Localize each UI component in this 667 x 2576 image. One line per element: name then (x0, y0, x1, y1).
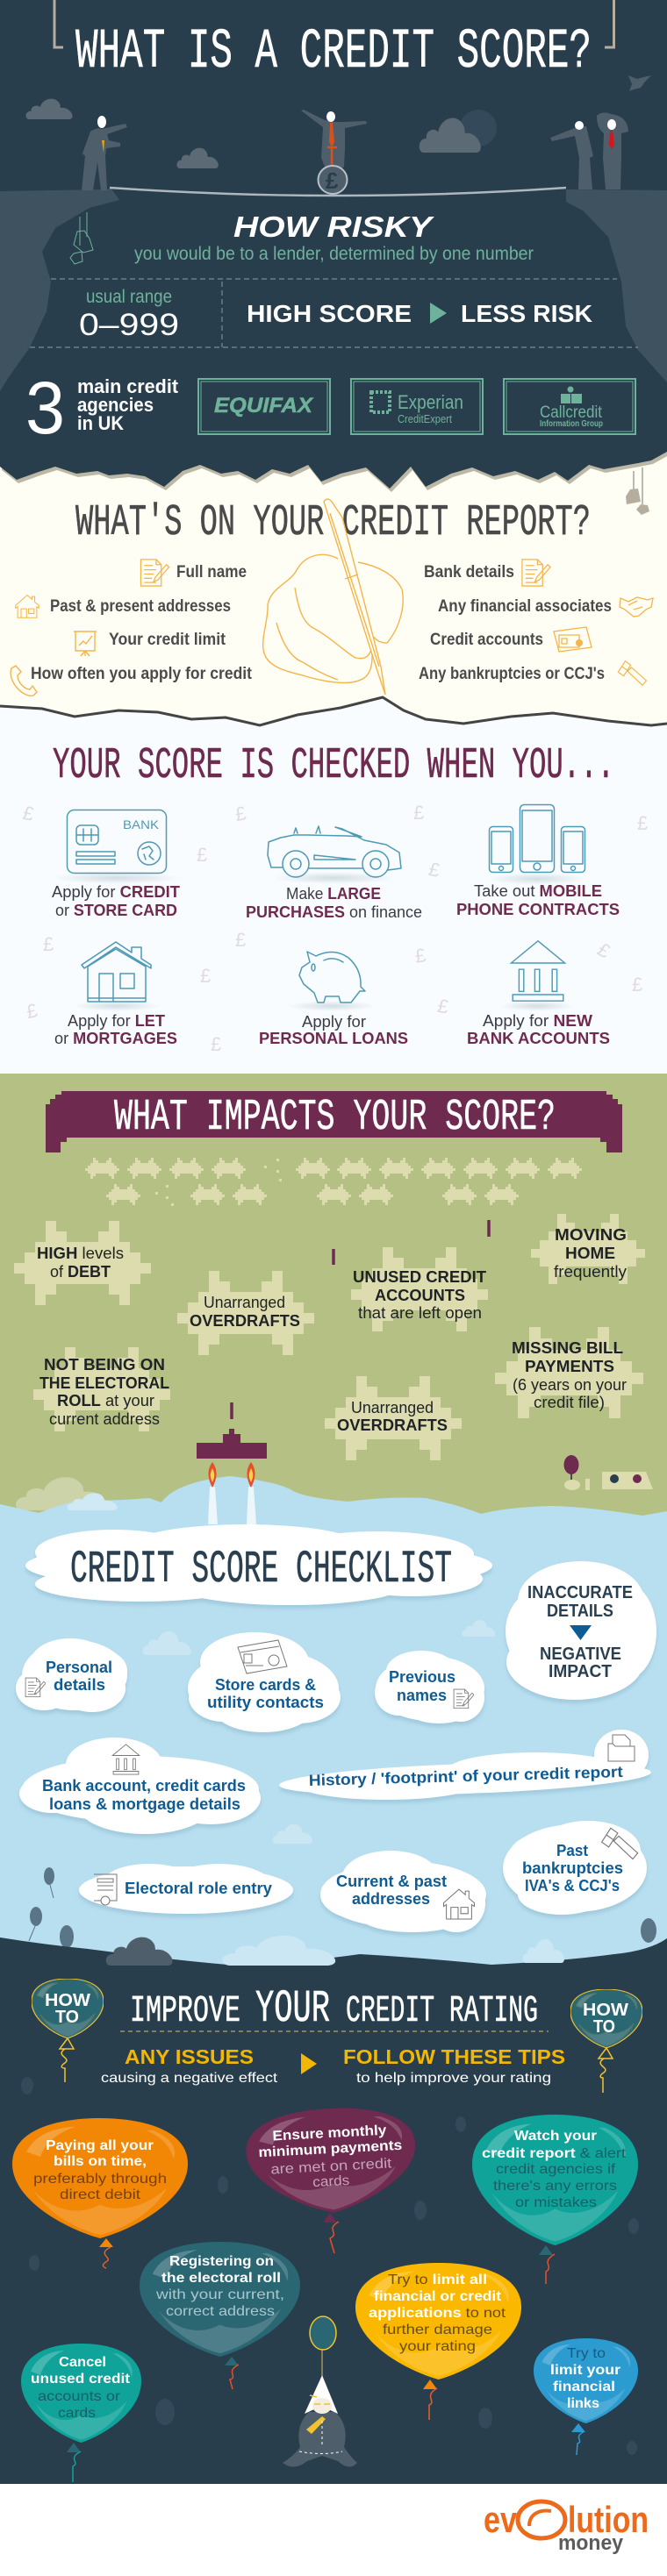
balloon: monthly payments: are met on credit (270, 2156, 392, 2178)
balloon: cancel unused credit (21, 2344, 141, 2482)
cloud: current and past addresses (320, 1851, 486, 1932)
how to balloon right: HOW (583, 2001, 628, 2020)
balloon: limit applications: financial or credit (374, 2289, 502, 2304)
balloon: limit financial links (534, 2338, 638, 2455)
logo box: Experian (351, 379, 483, 434)
heading: CREDIT RATING (346, 1989, 538, 2032)
panel: your score is checked when you (21, 741, 648, 1055)
balloon: monthly payments: cards (312, 2173, 350, 2190)
text: moving home: frequently (554, 1263, 627, 1281)
cloud: electoral role entry: Electoral role entry (125, 1880, 272, 1897)
balloon: limit applications: your rating (399, 2339, 476, 2354)
joystick and button panel (563, 1455, 653, 1490)
cloud: past bankruptcies: Past (556, 1842, 588, 1859)
item: bank building: Apply for NEW (483, 1012, 592, 1030)
balloon: watch credit report: credit agencies if (496, 2162, 616, 2177)
number: 3 agencies (25, 367, 179, 449)
item: house: Apply for LET (68, 1012, 165, 1030)
cloud: bank details: loans & mortgage details (49, 1795, 240, 1813)
text: electoral roll: ROLL at your (57, 1392, 154, 1409)
any issues (101, 2045, 278, 2086)
text: missing bill payments: PAYMENTS (525, 1358, 614, 1375)
balloon: limit applications: applications to not (369, 2306, 506, 2321)
text: unarranged overdrafts: Unarranged (204, 1294, 285, 1311)
cloud: store cards: utility contacts (207, 1694, 324, 1711)
follow these tips: FOLLOW THESE TIPS (343, 2045, 565, 2068)
title bracket (54, 0, 614, 47)
space invaders rows (85, 1158, 582, 1206)
light cloud (68, 1493, 117, 1510)
balloon: cancel unused credit: unused credit (31, 2372, 131, 2387)
balloon: electoral roll: Registering on (169, 2254, 274, 2269)
footer logo: evolution money: money (558, 2531, 624, 2555)
balloon: paying bills (12, 2118, 188, 2268)
item: piggy bank: PERSONAL LOANS (259, 1030, 408, 1047)
pound sign pattern (21, 802, 648, 1055)
item: house (54, 942, 177, 1047)
balloon: cancel unused credit: cards (58, 2406, 96, 2421)
cloud: current and past addresses: Current & past (336, 1873, 447, 1890)
how to balloon left (32, 1979, 104, 2082)
item: piggy bank (259, 952, 408, 1047)
text: unarranged overdrafts 2: OVERDRAFTS (337, 1416, 448, 1434)
item: addresses: Past & present addresses (50, 597, 231, 616)
balloon: limit applications (355, 2263, 521, 2420)
balloon: limit applications: Try to limit all (388, 2273, 487, 2287)
text: unused credit accounts (353, 1268, 486, 1322)
pound sign pattern: £ (211, 1033, 221, 1055)
any issues: causing a negative effect (101, 2071, 278, 2086)
text: unused credit accounts: that are left open (358, 1304, 482, 1322)
item: financial associates: Any financial associates (438, 597, 612, 616)
heading (130, 1983, 538, 2035)
text: electoral roll: THE ELECTORAL (39, 1374, 169, 1392)
text: moving home: MOVING (555, 1226, 627, 1244)
item: house: or MORTGAGES (54, 1030, 177, 1047)
cloud: inaccurate details: INACCURATE (527, 1583, 633, 1602)
how to balloon right (570, 1989, 642, 2093)
logo box: Equifax: EQUIFAX (214, 394, 314, 417)
text: unused credit accounts: ACCOUNTS (375, 1287, 465, 1304)
balloon: watch credit report (472, 2115, 638, 2284)
logo box: Experian: Experian (398, 391, 463, 413)
balloon: cancel unused credit: Cancel (59, 2355, 106, 2370)
balloon: limit financial links: financial (553, 2380, 615, 2394)
pound sign pattern: £ (43, 933, 54, 955)
cloud: current and past addresses: addresses (352, 1890, 430, 1908)
balloon: limit financial links: Try to (567, 2346, 606, 2361)
item: credit card: or STORE CARD (55, 902, 177, 919)
cloud: personal details (16, 1638, 127, 1712)
number: 3 agencies: in UK (77, 412, 124, 434)
game ship (197, 1429, 267, 1524)
cloud: store cards: Store cards & (215, 1676, 316, 1694)
high score less risk: HIGH SCORE (247, 300, 412, 327)
figures: two men on right (550, 112, 628, 189)
cloud: personal details: details (54, 1676, 105, 1694)
balloon: paying bills: Paying all your (46, 2138, 154, 2153)
clouds (26, 99, 497, 168)
footer logo: evolution money: lution (568, 2499, 649, 2540)
text: high debt: HIGH levels (37, 1245, 124, 1262)
arrow (301, 2053, 317, 2074)
text: moving home: HOME (565, 1245, 615, 1262)
tightrope (110, 188, 566, 196)
balloon: limit applications: further damage (383, 2323, 492, 2337)
pound sign pattern: £ (21, 802, 36, 825)
cloud: history footprint (279, 1730, 651, 1800)
item: bank details: Bank details (424, 563, 514, 582)
high score less risk: LESS RISK (461, 300, 592, 327)
pound sign pattern: £ (637, 812, 648, 834)
heading: how risky: HOW RISKY (233, 211, 435, 243)
balloon: watch credit report: or mistakes (515, 2195, 597, 2210)
faint balloons (21, 2077, 639, 2455)
item: bankruptcies: Any bankruptcies or CCJ's (419, 665, 605, 683)
pound sign pattern: £ (594, 938, 614, 962)
cloud: bank details (19, 1738, 261, 1834)
cloud: electoral role entry (79, 1864, 293, 1914)
balloon: electoral roll: correct address (166, 2304, 275, 2319)
text: electoral roll: current address (49, 1410, 160, 1428)
item: credit accounts (430, 627, 592, 652)
figure: unicyclist (301, 110, 367, 194)
balloon: watch credit report: Watch your (514, 2129, 597, 2144)
item: credit accounts: Credit accounts (430, 631, 543, 649)
cloud: previous names: names (397, 1687, 447, 1704)
how to balloon left: TO (55, 2008, 79, 2027)
logo box: Callcredit: Callcredit (540, 403, 603, 422)
icon: beige rocks (626, 467, 649, 515)
balloon: paying bills: bills on time, (54, 2154, 147, 2169)
figure: unicyclist: £ (326, 168, 339, 194)
balloon: watch credit report: there's any errors (493, 2179, 617, 2194)
any issues: ANY ISSUES (125, 2045, 254, 2068)
pound sign pattern: £ (235, 929, 246, 951)
hand and pen illustration (263, 499, 403, 695)
icon: bird (628, 75, 651, 91)
shadows (52, 872, 586, 1011)
balloon: paying bills: preferably through (33, 2172, 167, 2187)
figure: man floating with balloon (283, 2316, 357, 2467)
cloud: history footprint: History / 'footprint' of your credit report (309, 1763, 623, 1789)
pound sign pattern: £ (427, 858, 441, 881)
overlapping clouds (106, 1936, 564, 1966)
text: missing bill payments: credit file) (534, 1394, 605, 1411)
item: addresses (16, 596, 231, 617)
cloud: previous names: Previous (389, 1668, 455, 1686)
pound sign pattern: £ (632, 974, 642, 995)
pound sign pattern: £ (413, 802, 424, 824)
cloud: previous names (375, 1651, 484, 1723)
heading banner (46, 1091, 622, 1152)
subtitle: you would be to a lender, determined by one number (134, 244, 534, 264)
item: full name (140, 560, 247, 586)
text: electoral roll (39, 1356, 169, 1428)
logo box: Callcredit: Information Group (540, 418, 603, 429)
balloon: electoral roll: the electoral roll (161, 2271, 281, 2286)
balloon: limit financial links: links (567, 2396, 599, 2411)
panel: what impacts your score (0, 1074, 667, 1521)
figure: left man (82, 116, 127, 190)
cloud: inaccurate details: NEGATIVE (540, 1645, 621, 1664)
balloon: monthly payments (244, 2104, 419, 2253)
cloud: bank details: Bank account, credit cards (42, 1777, 246, 1795)
cloud: past bankruptcies: IVA's & CCJ's (525, 1877, 620, 1895)
text: moving home (554, 1226, 627, 1281)
laser bullets (232, 1220, 489, 1419)
icon: falling rocks (70, 212, 93, 264)
pound sign pattern: £ (25, 999, 39, 1023)
item: car (246, 826, 422, 921)
logo box: Equifax (198, 379, 330, 434)
footer logo: evolution money: ev (484, 2499, 518, 2540)
text: missing bill payments: MISSING BILL (512, 1339, 623, 1357)
text: unarranged overdrafts (190, 1294, 300, 1330)
logo box: Experian: CreditExpert (398, 412, 452, 425)
heading cloud (25, 1524, 492, 1605)
cliffs (0, 188, 667, 391)
item: apply frequency: How often you apply for credit (31, 665, 253, 683)
pale clouds (143, 1620, 495, 1844)
text: unarranged overdrafts 2 (337, 1399, 448, 1434)
text: missing bill payments (512, 1339, 627, 1411)
text: unarranged overdrafts: OVERDRAFTS (190, 1312, 300, 1330)
item: bank details (424, 560, 550, 586)
text: missing bill payments: (6 years on your (513, 1376, 627, 1394)
cloud: inaccurate details: IMPACT (549, 1662, 612, 1681)
heading: IMPROVE (130, 1989, 240, 2032)
pound sign pattern: £ (200, 965, 211, 987)
balloon: cancel unused credit: accounts or (38, 2389, 121, 2404)
item: mobile phones: PHONE CONTRACTS (456, 901, 620, 918)
balloon: paying bills: direct debit (60, 2187, 141, 2202)
panel: credit score checklist (0, 1429, 667, 1969)
cloud: inaccurate details (506, 1561, 656, 1700)
panel: improve your credit rating (0, 1936, 667, 2484)
item: full name: Full name (176, 563, 247, 582)
cloud: personal details: Personal (46, 1659, 112, 1676)
item: mobile phones: Take out MOBILE (474, 882, 602, 900)
item: credit card (52, 810, 180, 919)
item: credit card: BANK (123, 817, 160, 831)
pound sign pattern: £ (413, 944, 427, 967)
usual range: usual range (86, 287, 172, 307)
text: unused credit accounts: UNUSED CREDIT (353, 1268, 486, 1286)
balloon: watch credit report: credit report & alert (482, 2146, 627, 2161)
heading: YOUR (255, 1983, 330, 2035)
pound sign pattern: £ (197, 844, 207, 866)
item: bank building (467, 941, 610, 1047)
cloud: past bankruptcies (503, 1821, 647, 1915)
balloon: electoral roll (140, 2242, 300, 2389)
pound sign pattern: £ (233, 802, 247, 825)
balloon: monthly payments: minimum payments (258, 2138, 403, 2160)
high score less risk (247, 300, 592, 327)
balloon: limit financial links: limit your (550, 2363, 620, 2378)
panel: what is a credit score (0, 0, 667, 489)
follow these tips (343, 2045, 565, 2086)
dashed dividers (30, 279, 638, 347)
item: apply frequency (11, 665, 253, 696)
cloud: store cards (188, 1632, 341, 1732)
number: 3 agencies: agencies (77, 394, 154, 416)
how to balloon right: TO (593, 2017, 615, 2037)
pale cloud (16, 1477, 107, 1510)
balloon: electoral roll: with your current, (155, 2287, 284, 2302)
item: bank building: BANK ACCOUNTS (467, 1030, 610, 1047)
large invaders (14, 1214, 645, 1460)
number: 3 agencies: 3 (25, 367, 65, 449)
item: car: Make LARGE (286, 885, 381, 903)
cloud: inaccurate details: DETAILS (547, 1602, 613, 1621)
panel: what's on your credit report (11, 467, 653, 696)
item: piggy bank: Apply for (302, 1013, 366, 1031)
balloon: monthly payments: Ensure monthly (272, 2123, 387, 2144)
text: unarranged overdrafts 2: Unarranged (351, 1399, 434, 1416)
number: 3 agencies: main credit (77, 375, 179, 397)
text: high debt (37, 1245, 124, 1281)
small dark balloons (29, 1867, 656, 1948)
text: high debt: of DEBT (50, 1263, 111, 1281)
heading cloud: CREDIT SCORE CHECKLIST (70, 1544, 452, 1595)
item: credit card: Apply for CREDIT (52, 883, 180, 901)
pound sign pattern: £ (436, 995, 450, 1018)
footer logo: evolution money (484, 2499, 649, 2555)
how to balloon left: HOW (45, 1991, 90, 2010)
text: electoral roll: NOT BEING ON (44, 1356, 165, 1374)
number: range: 0–999 (79, 308, 179, 342)
logo box: Callcredit (504, 379, 635, 434)
cloud: past bankruptcies: bankruptcies (522, 1859, 623, 1877)
item: mobile phones (456, 805, 620, 918)
item: car: PURCHASES on finance (246, 903, 422, 921)
item: credit limit (74, 631, 226, 656)
item: credit limit: Your credit limit (109, 631, 226, 649)
follow these tips: to help improve your rating (356, 2071, 551, 2086)
